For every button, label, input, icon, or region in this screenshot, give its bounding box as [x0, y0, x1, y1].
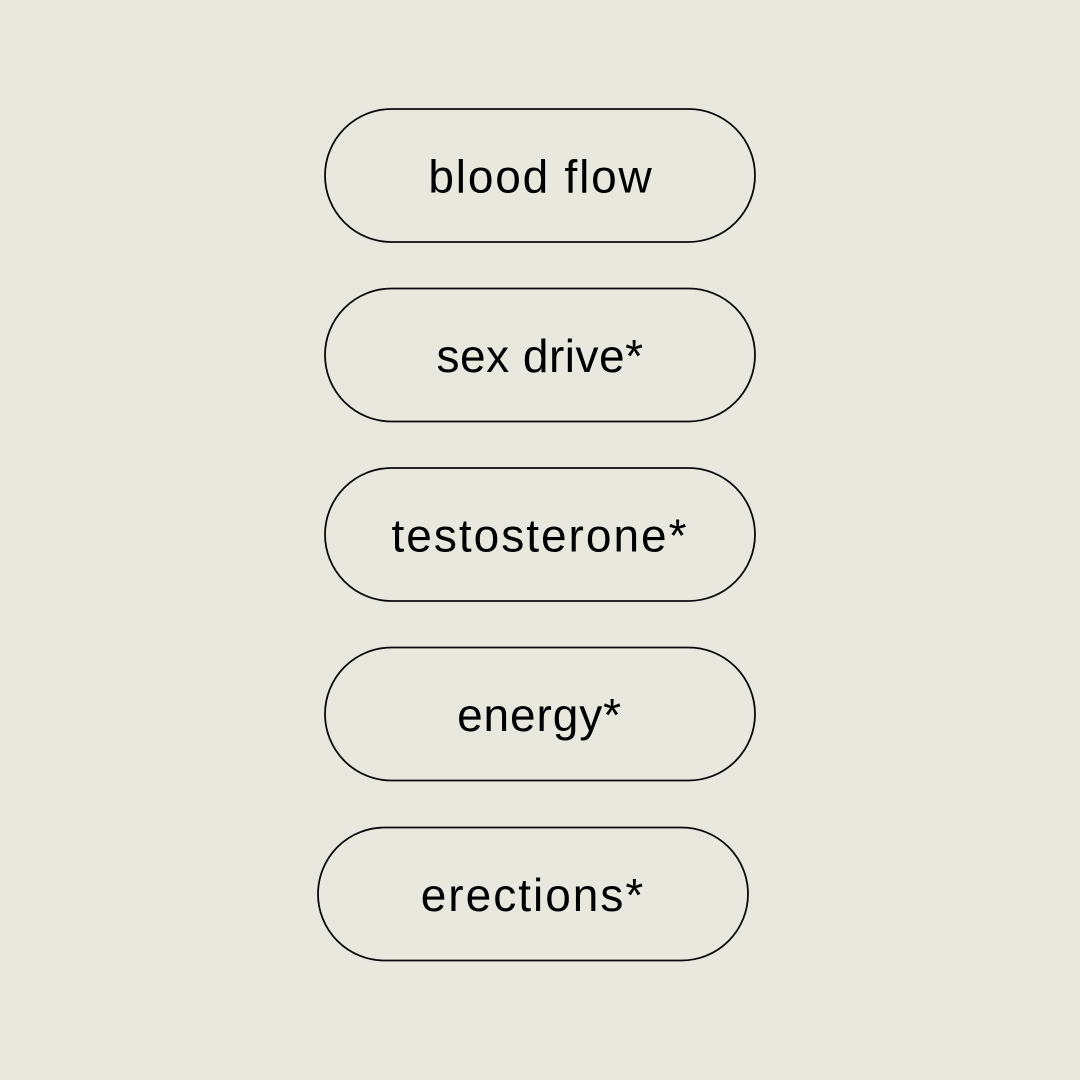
pill: sex drive: [325, 288, 755, 422]
label: energy: energy*: [457, 689, 622, 741]
label: blood flow: blood flow: [428, 150, 654, 202]
pill: erections: [318, 828, 748, 960]
pill: testosterone: [325, 468, 755, 601]
pill: energy: [325, 648, 755, 780]
label: erections: erections*: [421, 869, 645, 921]
label: sex drive: sex drive*: [437, 330, 643, 382]
pill: blood flow: [325, 109, 755, 242]
label: testosterone: testosterone*: [391, 510, 689, 562]
